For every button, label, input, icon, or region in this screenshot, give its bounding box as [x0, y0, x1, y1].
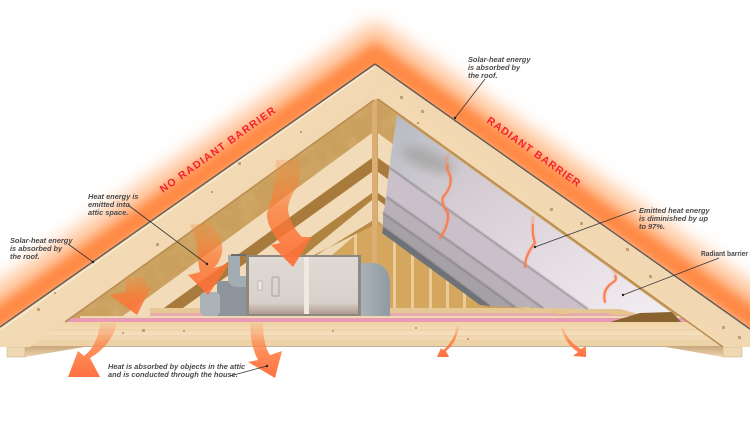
callout: emitted heat diminished: is diminished by up: [639, 214, 708, 223]
floor joists and pink insulation: [60, 308, 720, 322]
callout: solar heat left: is absorbed by: [10, 244, 63, 253]
arrow: heat emitted, large centre: [267, 160, 312, 267]
attic interior: [60, 96, 700, 325]
rear gable wall with studs: [270, 222, 500, 318]
callout: solar heat left: [10, 236, 94, 263]
heading: radiant barrier: RADIANT BARRIER: [484, 115, 583, 190]
ceiling tie beam: [28, 322, 726, 347]
callout: solar heat right: the roof.: [468, 71, 498, 80]
left main rafter: [0, 64, 375, 347]
callout: solar heat right: Solar-heat energy: [468, 55, 531, 64]
callout: solar heat left: Solar-heat energy: [10, 236, 73, 245]
right main rafter: [375, 64, 750, 347]
wavy heat lines on barrier: [440, 155, 616, 302]
callout: emitted heat diminished: [534, 206, 711, 248]
callout: emitted heat diminished: Emitted heat energy: [639, 206, 711, 215]
callout: emitted heat diminished: to 97%.: [639, 222, 665, 231]
arrow: heat conducted down, large left: [68, 323, 117, 377]
receding left rafters: [120, 133, 372, 318]
radiant barrier: [382, 115, 681, 322]
air handler unit: [246, 255, 361, 316]
sheathing: [60, 96, 700, 325]
callout: heat absorbed: [108, 362, 268, 379]
callout: heat emitted: emitted into: [88, 200, 130, 209]
callout: heat emitted: Heat energy is: [88, 192, 139, 201]
arrow: heat emitted, middle: [188, 222, 230, 295]
callout: radiant barrier: [622, 249, 748, 296]
callout: heat absorbed: and is conducted through the house.: [108, 370, 238, 379]
arrow: reduced heat, small right: [561, 327, 586, 357]
callout: solar heat right: is absorbed by: [468, 63, 521, 72]
heat glow above the roof: [0, 36, 750, 345]
left soffit and end block: [7, 346, 90, 357]
right soffit and end block: [660, 346, 742, 357]
receding right rafters: [378, 133, 560, 300]
left ductwork: [200, 254, 247, 316]
right duct: [361, 263, 390, 316]
arrow: reduced heat, small left: [437, 325, 459, 357]
arrow: heat conducted down, large right: [248, 323, 282, 378]
arrow: heat emitted, left small: [110, 277, 152, 315]
callout: solar heat left: the roof.: [10, 252, 40, 261]
heading: no radiant barrier: NO RADIANT BARRIER: [158, 105, 278, 195]
callout: heat absorbed: Heat is absorbed by objects in the attic: [108, 362, 245, 371]
callout: heat emitted: attic space.: [88, 208, 128, 217]
king post: [372, 98, 377, 318]
callout: solar heat right: [454, 55, 531, 119]
callout: heat emitted: [88, 192, 208, 265]
